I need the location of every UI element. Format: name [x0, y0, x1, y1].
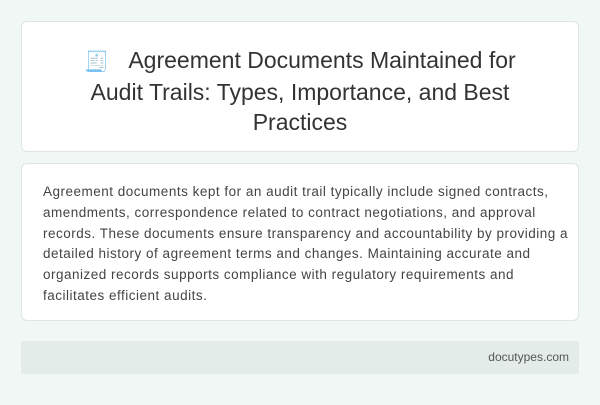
title: 🧾 Agreement Documents Maintained for Audit Trails: Types, Importance, and Best Practices: [84, 47, 516, 135]
footer: [21, 341, 579, 374]
description text: [43, 184, 568, 303]
title card: [21, 21, 579, 152]
footer: docutypes.com: [488, 350, 569, 364]
description text: organized records supports compliance with regulatory requirements and: [43, 267, 514, 282]
description text: detailed history of agreement terms and changes. Maintaining accurate and: [43, 246, 531, 261]
description text: Agreement documents kept for an audit trail typically include signed contracts,: [43, 184, 548, 199]
description text: facilitates efficient audits.: [43, 288, 207, 303]
description text: records. These documents ensure transparency and accountability by providing a: [43, 226, 568, 241]
description text: amendments, correspondence related to contract negotiations, and approval: [43, 205, 536, 220]
body card: [21, 163, 579, 321]
